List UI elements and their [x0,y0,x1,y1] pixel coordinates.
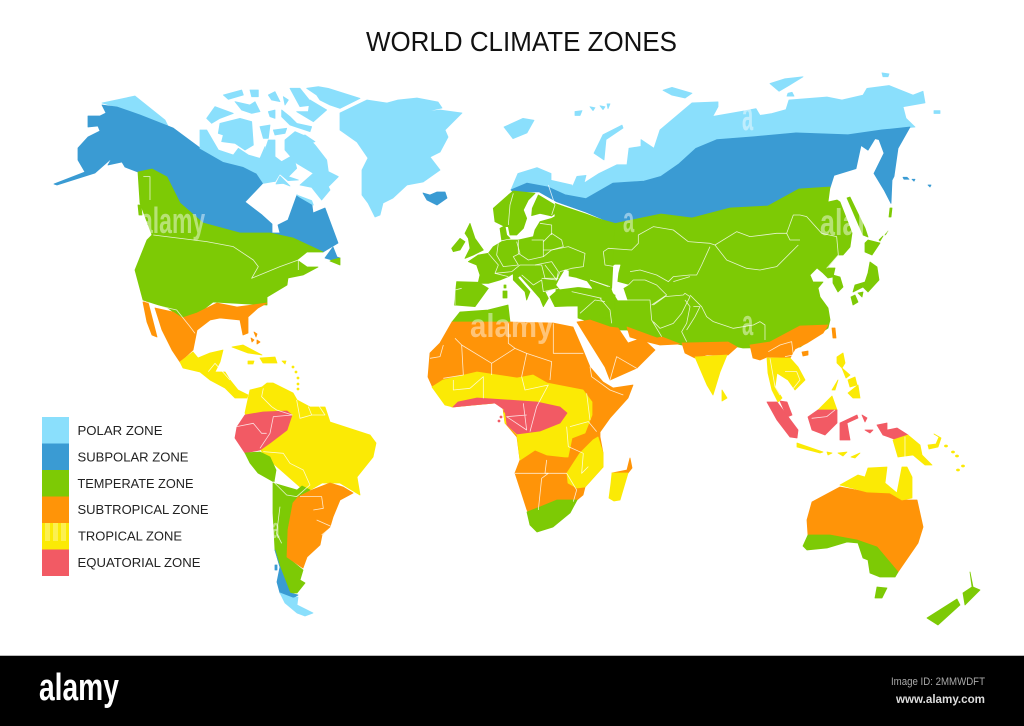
legend: subpolar zone: SUBPOLAR ZONE [78,450,189,464]
country borders: Africa [430,323,637,510]
UK [465,223,483,258]
country borders: East Asia [800,215,838,268]
image id: Image ID: 2MMWDFT [891,676,985,688]
country borders: North America [143,177,298,333]
legend: subpolar zone [42,444,189,470]
Southeast Asia islands [767,353,964,471]
Black Sea [557,270,592,289]
Caspian Sea [605,265,628,300]
New Zealand [927,572,980,625]
Central America [143,302,299,398]
Africa [428,322,633,532]
country borders: Southeast Asia [768,342,905,457]
legend: polar zone: POLAR ZONE [78,423,163,438]
legend: tropical zone [42,523,182,550]
country borders: South America [208,363,332,543]
Asia southern zones [627,325,836,402]
Eurasia polar coast [504,73,940,199]
Greenland [340,98,462,217]
footer bar [0,655,1024,726]
title: WORLD CLIMATE ZONES [366,26,677,57]
footer logo: alamy [39,666,119,709]
country borders: Asia [590,215,800,342]
watermarks: alamy [140,202,205,241]
Iceland [423,192,447,205]
watermarks: a [742,92,754,139]
watermarks: alamy [470,306,554,344]
legend: subtropical zone [42,496,209,523]
website: www.alamy.com [895,692,985,706]
legend: equatorial zone [42,550,201,576]
Mediterranean islands and North Africa coast [452,285,510,322]
watermarks: a [623,200,635,241]
North America [54,96,340,320]
Ireland [452,238,465,252]
Asia temperate zone [556,187,892,348]
legend: equatorial zone: EQUATORIAL ZONE [78,555,201,570]
watermarks [140,92,896,544]
legend: temperate zone [42,470,194,496]
watermarks: alamy [820,202,896,243]
watermarks: a [272,512,280,544]
legend: tropical zone: TROPICAL ZONE [78,528,182,544]
Europe [452,191,615,318]
Arabia [577,320,655,380]
Canadian Arctic [200,87,360,205]
legend [42,417,209,576]
legend: subtropical zone: SUBTROPICAL ZONE [78,502,209,517]
Australia [803,467,923,598]
Eurasia subpolar belt [511,127,931,224]
watermarks: a [742,303,754,344]
world map [54,73,980,625]
South America [235,383,376,616]
country borders: Europe [455,185,608,313]
legend: polar zone [42,417,163,444]
Madagascar [609,458,632,501]
legend: temperate zone: TEMPERATE ZONE [78,476,194,491]
